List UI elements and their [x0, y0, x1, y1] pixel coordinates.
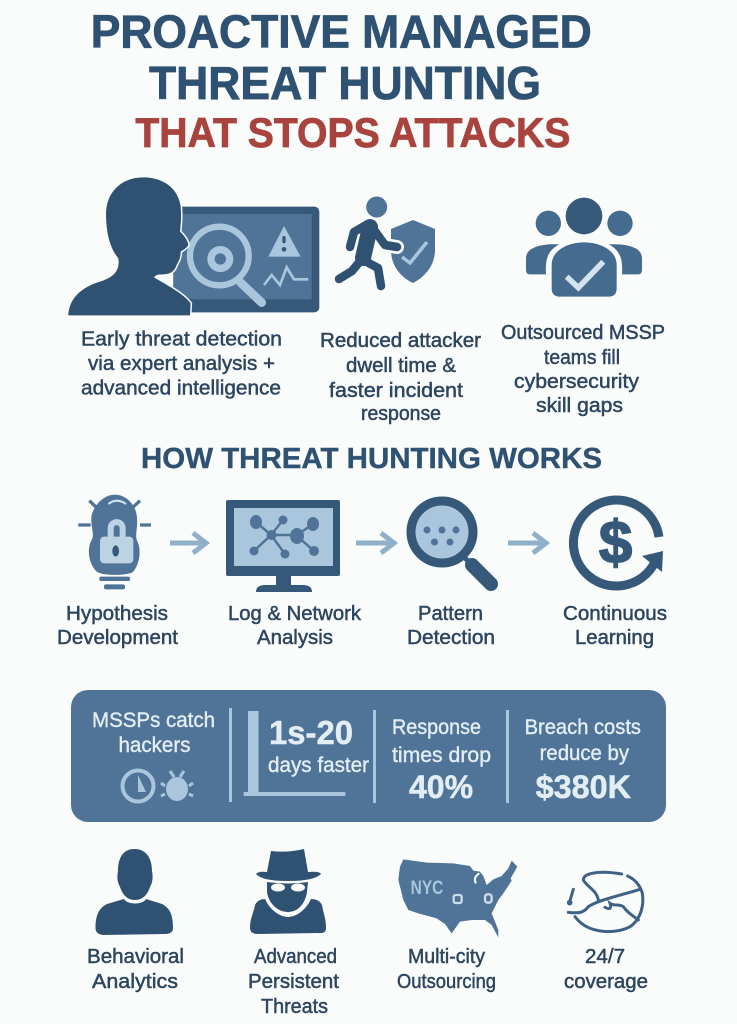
title [91, 6, 592, 156]
panel: reduced dwell time [320, 196, 481, 425]
caption: behavioral analytics: Analytics [92, 970, 178, 993]
caption: outsourced MSSP teams: teams fill [544, 346, 620, 369]
step: log and network analysis [226, 500, 362, 649]
stat: breach costs: Breach costs [525, 715, 641, 739]
stat: response times [392, 715, 491, 805]
caption: early threat detection [81, 328, 282, 400]
caption: continuous learning: Continuous [563, 602, 667, 625]
icon: person [96, 849, 173, 935]
step: continuous learning [563, 500, 667, 649]
panel: statistics band [71, 690, 666, 822]
caption: early threat detection: advanced intelligence [81, 376, 281, 400]
caption: 24/7 coverage [564, 945, 648, 993]
caption: 24/7 coverage: 24/7 [585, 945, 625, 968]
caption: advanced persistent threats: Threats [261, 995, 328, 1018]
caption: advanced persistent threats: Advanced [254, 945, 337, 968]
icon: bug [161, 771, 193, 801]
caption: multi-city outsourcing [397, 945, 496, 993]
title: THAT STOPS ATTACKS [135, 109, 570, 156]
caption: advanced persistent threats: Persistent [248, 970, 339, 993]
caption: log and network analysis [228, 602, 362, 649]
panel: outsourced MSSP teams [501, 198, 665, 417]
caption: continuous learning: Learning [575, 626, 654, 649]
caption: reduced dwell time: Reduced attacker [320, 329, 481, 352]
icon: analyst at monitor [68, 177, 319, 315]
caption: continuous learning [563, 602, 667, 649]
caption: log and network analysis: Log & Network [228, 602, 362, 625]
icon: globe sketch [568, 872, 643, 932]
caption: reduced dwell time: faster incident [329, 379, 463, 402]
heading: how threat hunting works: HOW THREAT HUNTING WORKS [141, 443, 602, 475]
caption: outsourced MSSP teams [501, 321, 665, 417]
arrow: step 2 to 3 [356, 533, 394, 553]
icon: runner with shield [339, 196, 435, 286]
stat: breach costs: reduce by [540, 741, 629, 765]
caption: log and network analysis: Analysis [257, 626, 333, 649]
icon: US map with NYC: NYC [411, 878, 443, 899]
icon: magnifier with dots [411, 501, 491, 584]
stat: days faster [244, 711, 369, 796]
stat: response times: Response [392, 715, 481, 739]
caption: advanced persistent threats [248, 945, 339, 1018]
icon: monitor with network graph [226, 500, 340, 592]
title: THREAT HUNTING [149, 57, 541, 109]
icon: bug with padlock [78, 495, 151, 589]
icon: team with check [526, 198, 642, 297]
caption: hypothesis development: Hypothesis [66, 602, 168, 625]
caption: early threat detection: via expert analysis + [88, 352, 275, 375]
caption: reduced dwell time [320, 329, 481, 425]
caption: outsourced MSSP teams: skill gaps [536, 394, 623, 417]
caption: behavioral analytics: Behavioral [87, 945, 184, 968]
icon: clock [122, 770, 154, 802]
step: hypothesis development [57, 495, 178, 649]
arrow: step 3 to 4 [508, 533, 546, 553]
stat: MSSPs catch hackers: hackers [118, 733, 190, 757]
stat: days faster: 1s-20 [269, 714, 353, 751]
caption: hypothesis development: Development [57, 626, 178, 649]
caption: pattern detection: Detection [407, 626, 495, 649]
title: PROACTIVE MANAGED [91, 6, 592, 58]
icon: spy in hat [250, 849, 326, 934]
caption: multi-city outsourcing: Outsourcing [397, 970, 496, 993]
caption: early threat detection: Early threat detection [81, 328, 282, 350]
caption: pattern detection [407, 602, 495, 649]
caption: reduced dwell time: response [361, 402, 441, 425]
item: advanced persistent threats [248, 849, 339, 1018]
icon: dollar with cycle arrow [573, 500, 663, 586]
stat: days faster: days faster [268, 753, 369, 777]
stat: response times: 40% [409, 769, 473, 805]
stat: breach costs: $380K [536, 769, 631, 805]
caption: outsourced MSSP teams: cybersecurity [514, 370, 640, 393]
arrow: step 1 to 2 [170, 533, 206, 553]
item: multi-city outsourcing [397, 859, 517, 993]
stat: breach costs [525, 715, 641, 805]
caption: reduced dwell time: dwell time & [346, 354, 456, 377]
panel: early threat detection [68, 177, 319, 400]
caption: pattern detection: Pattern [418, 602, 483, 625]
caption: behavioral analytics [87, 945, 184, 993]
caption: hypothesis development [57, 602, 178, 649]
item: 24/7 coverage [564, 872, 648, 993]
stat: MSSPs catch hackers: MSSPs catch [92, 708, 215, 732]
stat: MSSPs catch hackers [92, 708, 215, 802]
caption: 24/7 coverage: coverage [564, 970, 648, 993]
stat: response times: times drop [392, 743, 491, 767]
icon: dollar with cycle arrow: $ [599, 509, 632, 576]
item: behavioral analytics [87, 849, 184, 993]
step: pattern detection [407, 501, 495, 649]
caption: outsourced MSSP teams: Outsourced MSSP [501, 321, 665, 344]
caption: multi-city outsourcing: Multi-city [408, 945, 486, 968]
